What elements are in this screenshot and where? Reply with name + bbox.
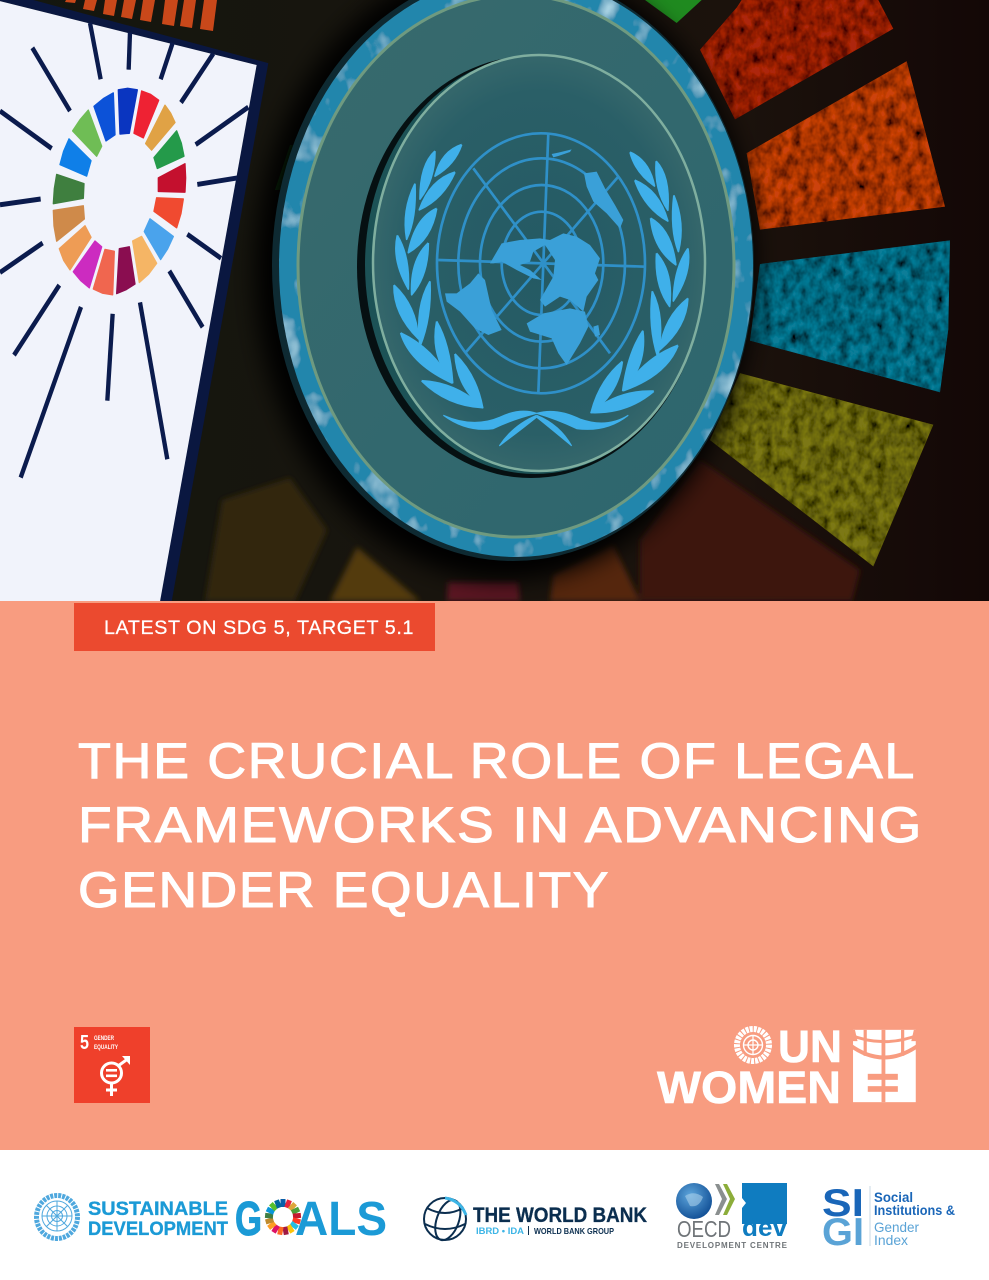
UN emblem: globe grid and continents [437,133,645,393]
logo: OECD Development Centre: DEVELOPMENT CENTRE [677,1241,788,1250]
UN mini emblem [737,1029,769,1061]
logo: OECD Development Centre: OECD [677,1216,731,1242]
continents [445,149,623,365]
icon: SDG 5 gender equality: GENDER [94,1036,115,1042]
logo: Sustainable Development Goals [36,1193,387,1246]
logo: The World Bank [424,1197,647,1244]
inner disc of UN emblem [357,55,705,478]
logo: Sustainable Development Goals: SUSTAINABLE [88,1198,228,1220]
logo: UN Women [657,1021,920,1113]
logo: Social Institutions and Gender Index: Gender [874,1219,919,1235]
logo: Sustainable Development Goals: ALS [295,1193,387,1246]
shadow around the emblem [255,0,755,580]
logo: Social Institutions and Gender Index: Social [874,1189,913,1205]
rays [0,23,248,478]
green glow left of ring [275,145,297,190]
logo: Social Institutions and Gender Index: Institutions & [874,1202,955,1218]
icon: SDG 5 gender equality: 5 [80,1032,89,1054]
cover photo: UN emblem and SDG wheel [0,0,989,602]
logo: Social Institutions and Gender Index: GI [822,1211,864,1254]
UN emblem small [36,1196,78,1238]
salmon title panel [0,601,989,1150]
logo: OECD Development Centre: dev [742,1214,787,1242]
tag: latest on SDG 5: LATEST ON SDG 5, TARGET 5.1 [104,618,414,639]
logo: UN Women: UN [778,1021,842,1072]
UN Women mark [849,1030,920,1102]
white panel with SDG wheel [0,0,268,602]
logo: The World Bank: THE WORLD BANK [473,1204,647,1227]
UN emblem: laurel wreath [394,145,697,446]
SDG small colour ring [265,1199,301,1235]
SDG wheel coloured wedges on the wall [645,0,950,566]
icon: SDG 5 gender equality [74,1027,150,1103]
dim lower wedges [205,460,860,601]
logo: Sustainable Development Goals: G [235,1193,262,1246]
SDG colour ring [53,88,186,295]
World Bank globe [424,1197,466,1244]
logo: Social Institutions and Gender Index: SI [822,1182,864,1225]
title [78,733,923,918]
right laurel [591,150,697,420]
logo: The World Bank: WORLD BANK GROUP [534,1226,614,1236]
logo: Sustainable Development Goals: DEVELOPMENT [88,1218,228,1240]
globe grid [437,133,645,393]
tag: latest on SDG 5 [74,603,435,651]
logo: The World Bank: IBRD • IDA [476,1226,524,1237]
title: FRAMEWORKS IN ADVANCING [78,797,923,853]
outer ring of UN emblem [272,0,754,561]
logo: UN Women: WOMEN [657,1062,841,1113]
orange stripes at top [65,0,217,31]
logo: Social Institutions and Gender Index [822,1182,955,1254]
left laurel [394,145,483,408]
icon: SDG 5 gender equality: EQUALITY [94,1045,118,1051]
laurel ribbons [443,411,628,446]
title: GENDER EQUALITY [78,862,610,918]
logo: OECD Development Centre [676,1183,788,1250]
logo: Social Institutions and Gender Index: Index [874,1232,908,1248]
title: THE CRUCIAL ROLE OF LEGAL [78,733,916,789]
